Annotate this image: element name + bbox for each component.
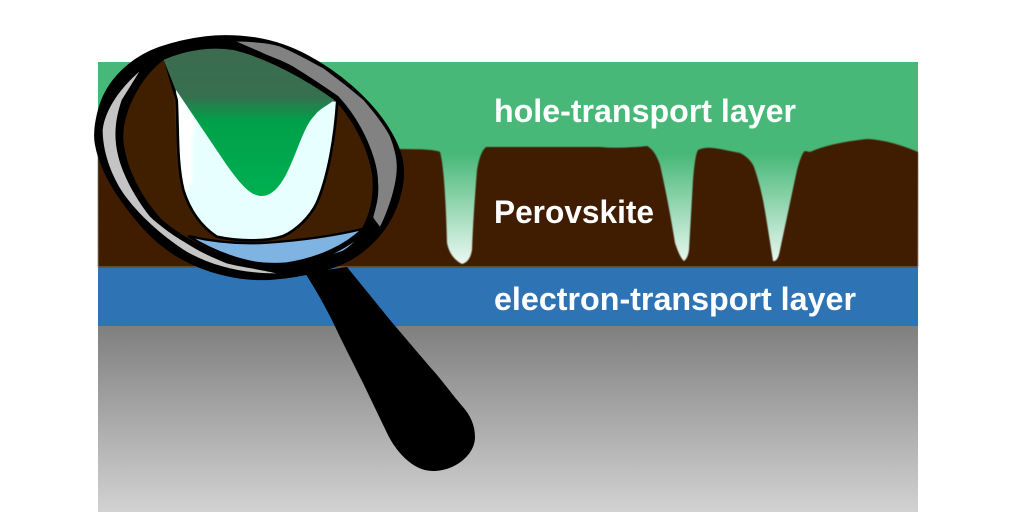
hole-transport layer band (98, 62, 918, 267)
substrate layer (98, 326, 918, 512)
lens interior: green hole-transport fill (163, 46, 337, 196)
lens interior: white highlight (177, 90, 195, 193)
outer black rim (94, 35, 404, 280)
electron-transport layer band (98, 267, 918, 326)
icon: magnifying glass lens and rim (94, 35, 404, 280)
dark grey rim section (237, 42, 397, 227)
lens interior: pore outline (165, 59, 337, 240)
lens interior: light-blue electron-transport layer (188, 228, 365, 265)
lens interior: cyan pore (176, 90, 337, 240)
perovskite layer with pores (98, 139, 918, 267)
label: hole-transport layer: hole-transport layer (494, 93, 796, 129)
label: Perovskite: Perovskite (494, 194, 654, 230)
lens outline (121, 46, 375, 266)
icon: magnifying glass handle (305, 267, 475, 471)
light grey rim section (103, 72, 277, 273)
label: electron-transport layer: electron-transport layer (494, 281, 856, 317)
lens interior: brown perovskite (121, 46, 375, 266)
